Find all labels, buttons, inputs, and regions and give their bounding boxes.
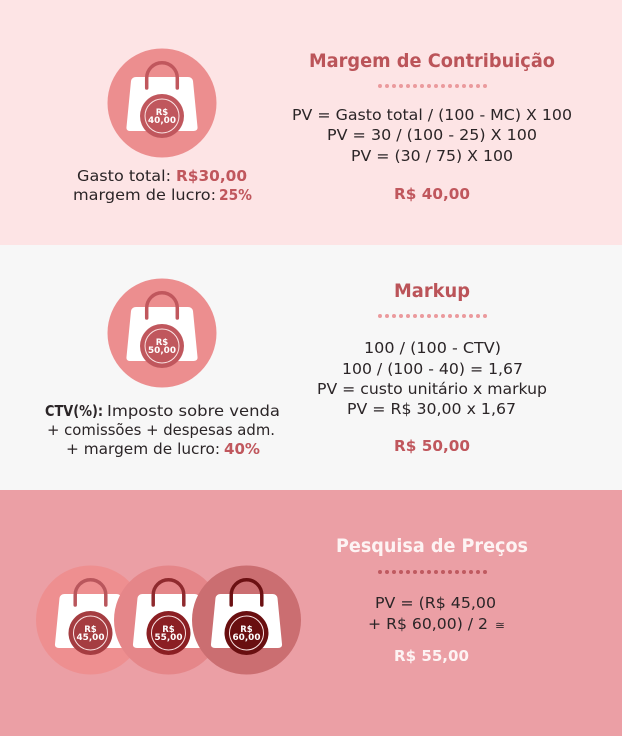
text: fórmula: PV = 30 / (100 - 25) X 100 — [327, 126, 537, 144]
heading: Pesquisa de Preços: Pesquisa de Preços — [336, 535, 528, 557]
text: fórmula da média — [368, 594, 505, 633]
icon: shopping bag R$ 50,00: R$ — [156, 338, 168, 348]
icon: shopping bag R$ 45,00: 45,00 — [76, 633, 105, 643]
icon: shopping bag R$ 60,00: 60,00 — [232, 633, 261, 643]
panel: Markup — [0, 245, 622, 490]
text: fórmula: PV = Gasto total / (100 - MC) X 100 — [292, 106, 572, 124]
text: gasto total e margem de lucro — [73, 167, 252, 204]
text: composição do CTV: Imposto sobre venda — [107, 402, 280, 420]
icon: shopping bag R$ 40,00 — [108, 48, 216, 158]
text: gasto total e margem de lucro: R$30,00 — [176, 167, 247, 185]
price: R$ 50,00: R$ 50,00 — [394, 437, 470, 455]
price: R$ 40,00: R$ 40,00 — [394, 185, 470, 203]
text: fórmula do markup: 100 / (100 - 40) = 1,67 — [342, 360, 523, 378]
icon: shopping bag R$ 50,00: 50,00 — [148, 346, 176, 356]
icon: shopping bag R$ 60,00 — [192, 566, 301, 674]
panel: Margem de Contribuição — [0, 0, 622, 245]
text: gasto total e margem de lucro: margem de lucro: — [73, 186, 216, 204]
text: fórmula do markup: PV = custo unitário x markup — [317, 380, 547, 398]
text: composição do CTV: CTV(%): — [45, 402, 103, 420]
icon: shopping bag R$ 45,00 — [36, 566, 145, 674]
text: fórmula da média: + R$ 60,00) / 2 — [368, 615, 488, 633]
text: fórmula da média: PV = (R$ 45,00 — [375, 594, 496, 612]
text: composição do CTV: + comissões + despesas adm. — [47, 421, 275, 439]
price: R$ 55,00: R$ 55,00 — [394, 647, 469, 665]
icon: shopping bag R$ 40,00: 40,00 — [148, 116, 176, 126]
text: fórmula da média: ≅ — [495, 619, 505, 632]
icon: shopping bag R$ 55,00: R$ — [162, 625, 175, 635]
text: fórmula: PV = (30 / 75) X 100 — [351, 147, 513, 165]
text: composição do CTV: + margem de lucro: — [66, 440, 220, 458]
text: gasto total e margem de lucro: Gasto total: — [77, 167, 171, 185]
icon: shopping bag R$ 45,00: R$ — [84, 625, 97, 635]
text: gasto total e margem de lucro: 25% — [219, 186, 252, 204]
heading: Margem de Contribuição: Margem de Contribuição — [309, 50, 555, 72]
text: fórmula do markup: PV = R$ 30,00 x 1,67 — [347, 400, 516, 418]
heading: Markup: Markup — [394, 280, 470, 302]
icon: shopping bag R$ 50,00 — [108, 278, 216, 388]
icon: shopping bag R$ 40,00: R$ — [156, 108, 168, 118]
text: fórmula — [292, 106, 572, 165]
text: fórmula do markup — [317, 339, 547, 418]
panel: Pesquisa de Preços — [0, 490, 622, 736]
icon: shopping bag R$ 60,00: R$ — [240, 625, 253, 635]
text: composição do CTV — [45, 402, 280, 458]
text: composição do CTV: 40% — [224, 440, 260, 458]
text: fórmula do markup: 100 / (100 - CTV) — [364, 339, 501, 357]
icon: shopping bag R$ 55,00 — [114, 566, 223, 674]
icon: shopping bag R$ 55,00: 55,00 — [154, 633, 183, 643]
